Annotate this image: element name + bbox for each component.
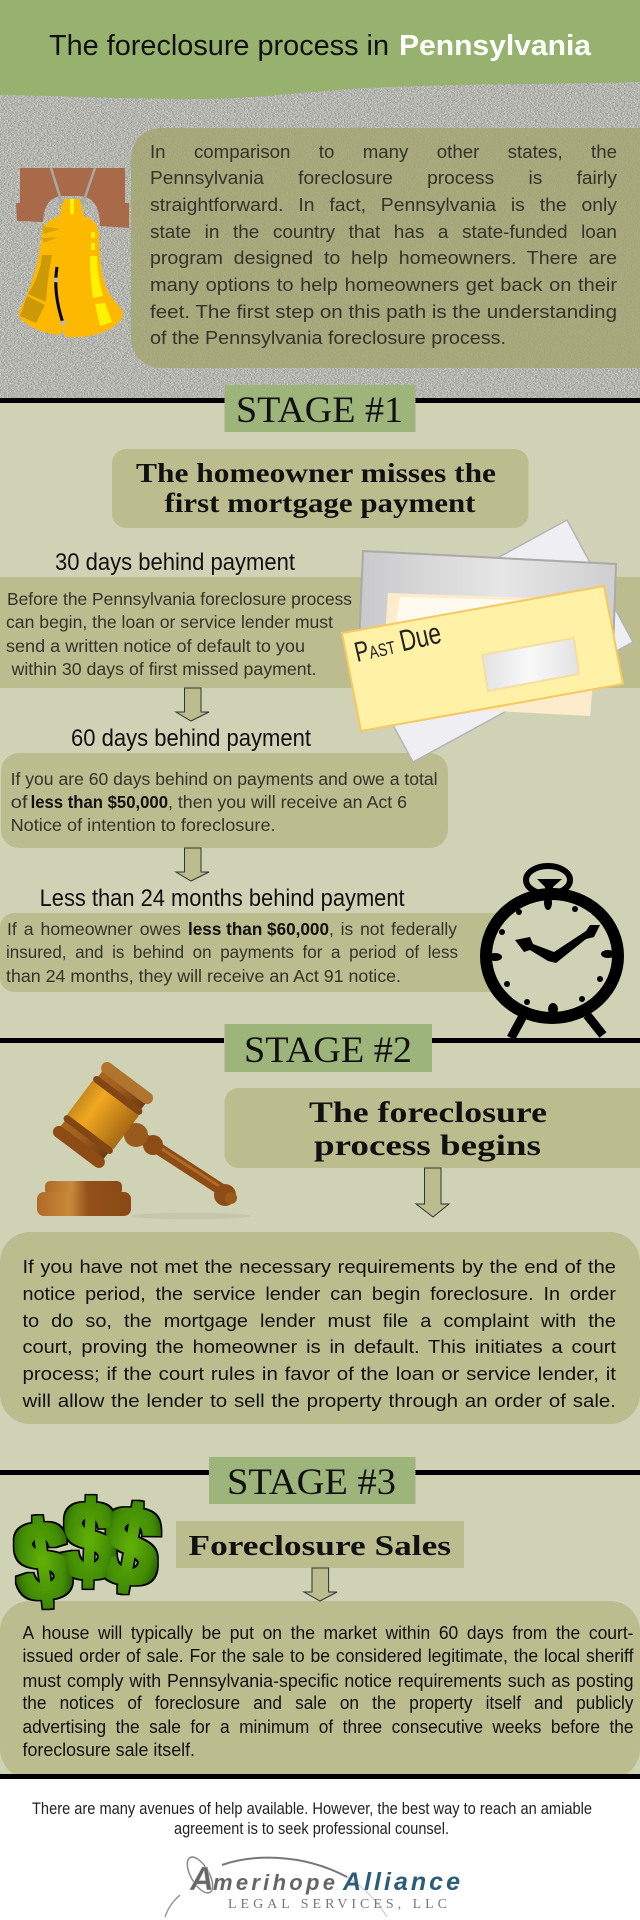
intro text: of the Pennsylvania foreclosure process. bbox=[150, 327, 506, 348]
panel: less than 24 months bbox=[0, 913, 510, 992]
panel: foreclosure explanation: will allow the lender to sell the property through an order of sale. bbox=[21, 1390, 616, 1411]
arrow 4 bbox=[304, 1568, 337, 1601]
logo: Amerihope Alliance: Alliance bbox=[342, 1868, 460, 1896]
panel: foreclosure sales heading: Foreclosure Sales bbox=[188, 1530, 451, 1562]
panel: foreclosure begins bbox=[224, 1088, 640, 1168]
panel: less than 24 months: less than $60,000 bbox=[188, 919, 329, 939]
panel: foreclosure explanation: to do so, the mortgage lender must file a complaint with the bbox=[22, 1310, 616, 1331]
panel: 60 days: If you are 60 days behind on payments and owe a total bbox=[11, 769, 438, 789]
intro text bbox=[150, 141, 618, 348]
body text: within 30 days of first missed payment. bbox=[10, 659, 317, 679]
panel: foreclosure begins: process begins bbox=[314, 1129, 541, 1162]
header banner bbox=[0, 0, 640, 99]
body text: send a written notice of default to you bbox=[6, 636, 305, 656]
divider line 1 bbox=[0, 398, 640, 403]
panel: 60 days bbox=[1, 753, 448, 848]
panel: intro bbox=[131, 128, 640, 368]
title: The foreclosure process in bbox=[49, 30, 389, 62]
panel: foreclosure sales explanation: foreclosure sale itself. bbox=[22, 1739, 195, 1760]
stage 1 heading: STAGE #1 bbox=[236, 390, 403, 431]
intro text: feet. The first step on this path is the understanding bbox=[150, 301, 617, 322]
panel: less than 24 months: , is not federally bbox=[329, 919, 457, 939]
panel: homeowner misses payment: The homeowner misses the bbox=[136, 458, 496, 488]
stage 2 heading: STAGE #2 bbox=[244, 1030, 412, 1071]
body text: Before the Pennsylvania foreclosure process bbox=[7, 589, 352, 609]
panel: foreclosure explanation: process; if the court rules in favor of the loan or service lender, it bbox=[22, 1363, 616, 1384]
icon: gavel bbox=[37, 1060, 250, 1219]
panel: foreclosure begins: The foreclosure bbox=[309, 1096, 547, 1129]
heading: less than 24 months: Less than 24 months behind payment bbox=[40, 885, 405, 912]
logo: Amerihope Alliance: A bbox=[189, 1860, 214, 1897]
logo: Amerihope Alliance: LEGAL SERVICES, LLC bbox=[228, 1897, 447, 1912]
title: Pennsylvania bbox=[399, 30, 592, 62]
intro text: Pennsylvania foreclosure process is fairly bbox=[150, 167, 618, 188]
panel: 60 days: less than $50,000 bbox=[31, 792, 168, 812]
band: 30 days bbox=[0, 577, 640, 688]
icon: dollar signs: $ bbox=[8, 1498, 77, 1624]
icon: alarm clock bbox=[486, 866, 618, 1038]
divider line 2 bbox=[0, 1038, 640, 1043]
stage 3 heading: STAGE #3 bbox=[227, 1462, 396, 1503]
panel: foreclosure sales heading bbox=[176, 1521, 464, 1568]
panel: homeowner misses payment: first mortgage payment bbox=[164, 488, 476, 518]
arrow 1 bbox=[176, 688, 209, 721]
arrow 3 bbox=[416, 1168, 449, 1217]
icon: dollar signs bbox=[8, 1479, 169, 1624]
body text: can begin, the loan or service lender must bbox=[6, 612, 333, 632]
panel: homeowner misses payment bbox=[112, 449, 528, 528]
closing text: agreement is to seek professional counsel. bbox=[174, 1820, 449, 1838]
heading: 30 days behind payment bbox=[55, 549, 295, 576]
heading: 60 days: 60 days behind payment bbox=[71, 725, 311, 752]
intro text: state in the country that has a state-funded loan bbox=[150, 221, 617, 242]
panel: foreclosure explanation bbox=[0, 1232, 640, 1424]
block: 30 days behind payment bbox=[6, 549, 352, 679]
panel: less than 24 months: If a homeowner owes bbox=[7, 919, 181, 939]
logo: Amerihope Alliance bbox=[165, 1853, 460, 1917]
green wavy banner bbox=[0, 0, 640, 99]
intro text: many options to help homeowners get back on their bbox=[150, 274, 617, 295]
arrow 2 bbox=[176, 848, 209, 881]
panel: foreclosure explanation: court, proving the homeowner is in default. This initiates a court bbox=[22, 1336, 616, 1357]
logo: Amerihope Alliance: merihope bbox=[213, 1870, 335, 1895]
icon: dollar signs: $ bbox=[61, 1479, 118, 1602]
panel: foreclosure sales explanation: must comply with Pennsylvania-specific notice requirements such as posting bbox=[22, 1670, 634, 1691]
icon: past due envelopes bbox=[342, 520, 633, 762]
panel: foreclosure sales explanation bbox=[0, 1601, 640, 1779]
title bbox=[49, 30, 592, 62]
panel: 60 days: , then you will receive an Act 6 bbox=[168, 792, 407, 812]
closing text bbox=[32, 1800, 592, 1838]
textured linen background bbox=[0, 75, 640, 400]
intro text: In comparison to many other states, the bbox=[150, 141, 617, 162]
panel: 60 days: Notice of intention to foreclosure. bbox=[11, 815, 276, 835]
content background bbox=[0, 400, 640, 1777]
intro panel background bbox=[131, 128, 640, 368]
icon: dollar signs: $ bbox=[92, 1483, 169, 1611]
handwritten label: past due: PAST Due bbox=[351, 617, 444, 669]
panel: foreclosure explanation: notice period, the service lender can begin foreclosure. In order bbox=[22, 1283, 616, 1304]
panel: 60 days: of bbox=[11, 792, 28, 812]
stage 3 heading bbox=[209, 1457, 416, 1504]
body text bbox=[6, 589, 352, 679]
stage 2 heading bbox=[224, 1024, 432, 1072]
divider line 3 bbox=[0, 1470, 640, 1475]
panel: foreclosure explanation: If you have not met the necessary requirements by the end of the bbox=[22, 1256, 616, 1277]
intro text: program designed to help homeowners. There are bbox=[150, 247, 617, 268]
panel: less than 24 months: than 24 months, they will receive an Act 91 notice. bbox=[6, 966, 401, 986]
icon: liberty bell bbox=[16, 168, 129, 337]
divider line 4 bbox=[0, 1774, 640, 1779]
panel: less than 24 months: insured, and is behind on payments for a period of less bbox=[6, 942, 458, 962]
intro text: straightforward. In fact, Pennsylvania is the only bbox=[150, 194, 618, 215]
